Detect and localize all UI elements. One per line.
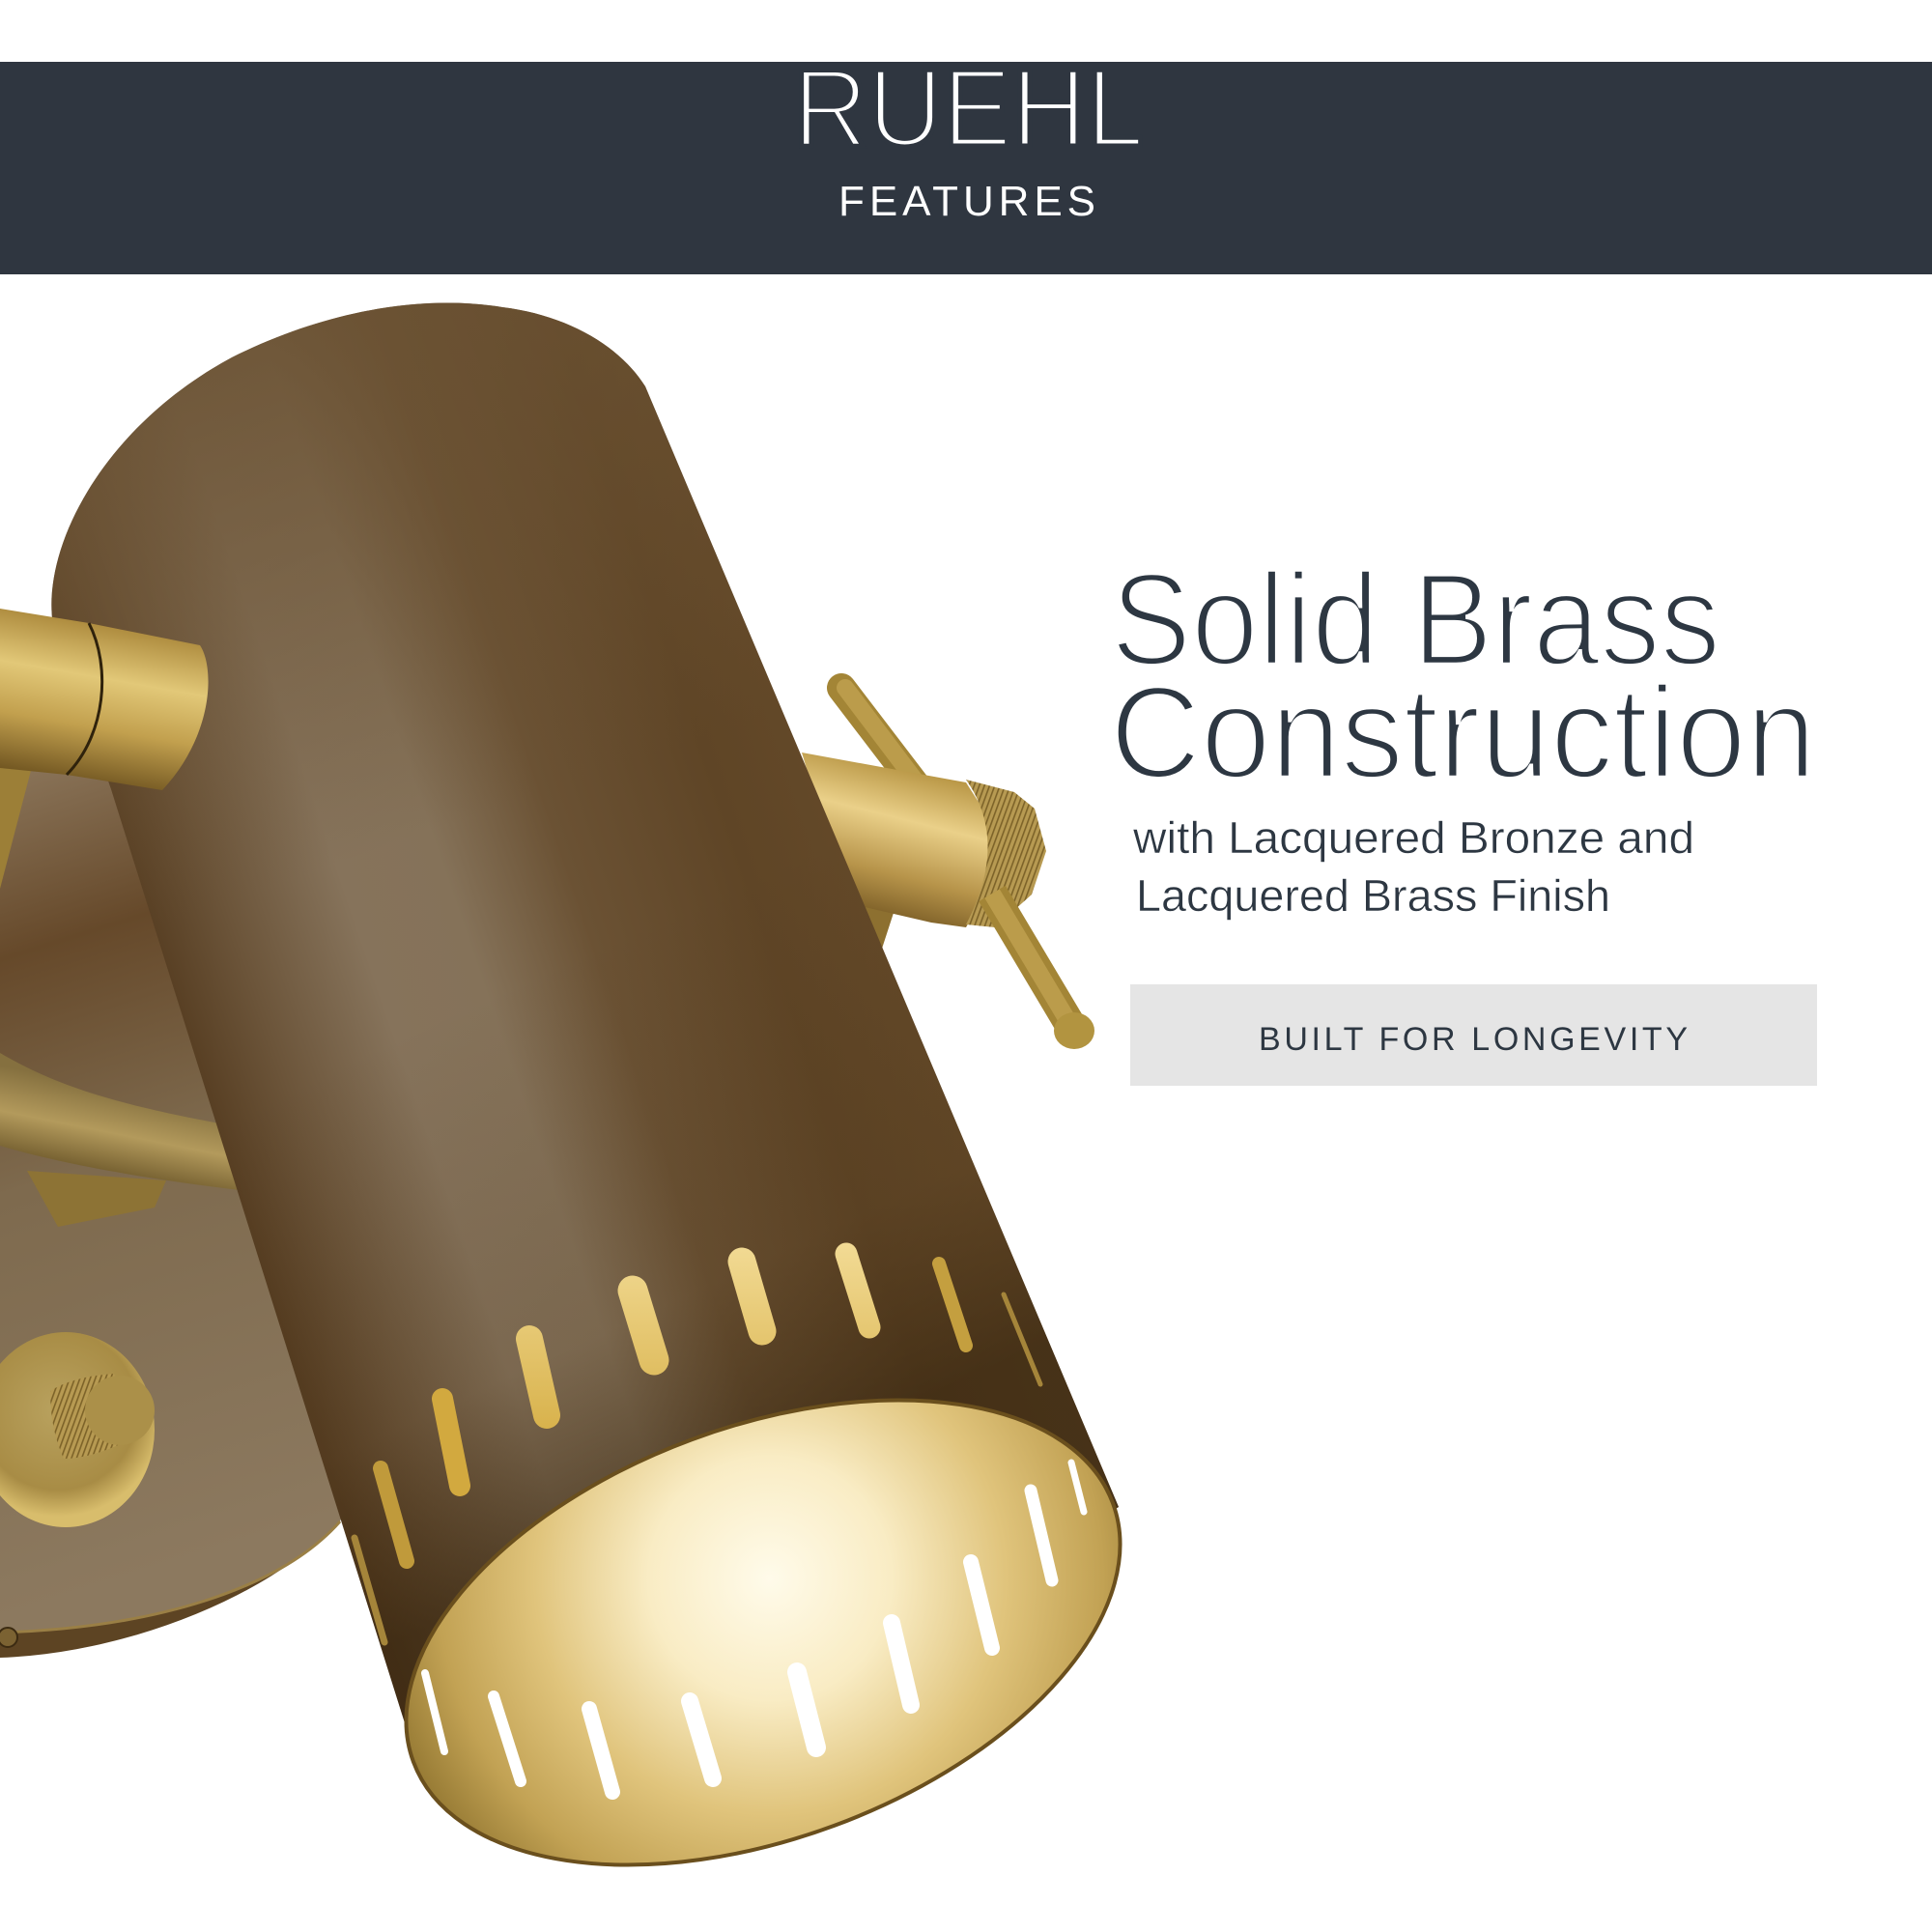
title: RUEHL: RUEHL bbox=[793, 47, 1144, 170]
backplate bbox=[0, 744, 406, 1658]
stem bbox=[860, 898, 894, 952]
barrel bbox=[802, 753, 1009, 927]
lamp shade body bbox=[51, 303, 1119, 1729]
header band bbox=[0, 62, 1932, 274]
subheading bbox=[1132, 812, 1694, 921]
callout: built for longevity: BUILT FOR LONGEVITY bbox=[1259, 1021, 1688, 1058]
subtitle: FEATURES: FEATURES bbox=[838, 178, 1095, 225]
knurled ring bbox=[966, 780, 1046, 927]
callout: built for longevity bbox=[1130, 984, 1817, 1086]
headline bbox=[1110, 546, 1816, 806]
plate screw bbox=[0, 1628, 17, 1647]
upper rod bbox=[841, 688, 923, 794]
adjuster disc and knob bbox=[0, 1332, 155, 1527]
outer slots bbox=[355, 1254, 1040, 1642]
left brass arm cylinder bbox=[0, 609, 209, 790]
lower rod bbox=[992, 894, 1073, 1030]
inner slots bbox=[425, 1463, 1084, 1792]
support stem bbox=[0, 753, 33, 889]
subheading: with Lacquered Bronze and bbox=[1132, 812, 1694, 863]
lamp illustration bbox=[0, 303, 1184, 1932]
subheading: Lacquered Brass Finish bbox=[1136, 870, 1610, 921]
lamp shade mouth interior bbox=[342, 1310, 1184, 1932]
rod end cap bbox=[1054, 1012, 1094, 1049]
curved arm bbox=[0, 1053, 309, 1227]
headline: Solid Brass bbox=[1111, 546, 1720, 693]
right knob assembly bbox=[802, 688, 1094, 1049]
headline: Construction bbox=[1110, 659, 1816, 806]
